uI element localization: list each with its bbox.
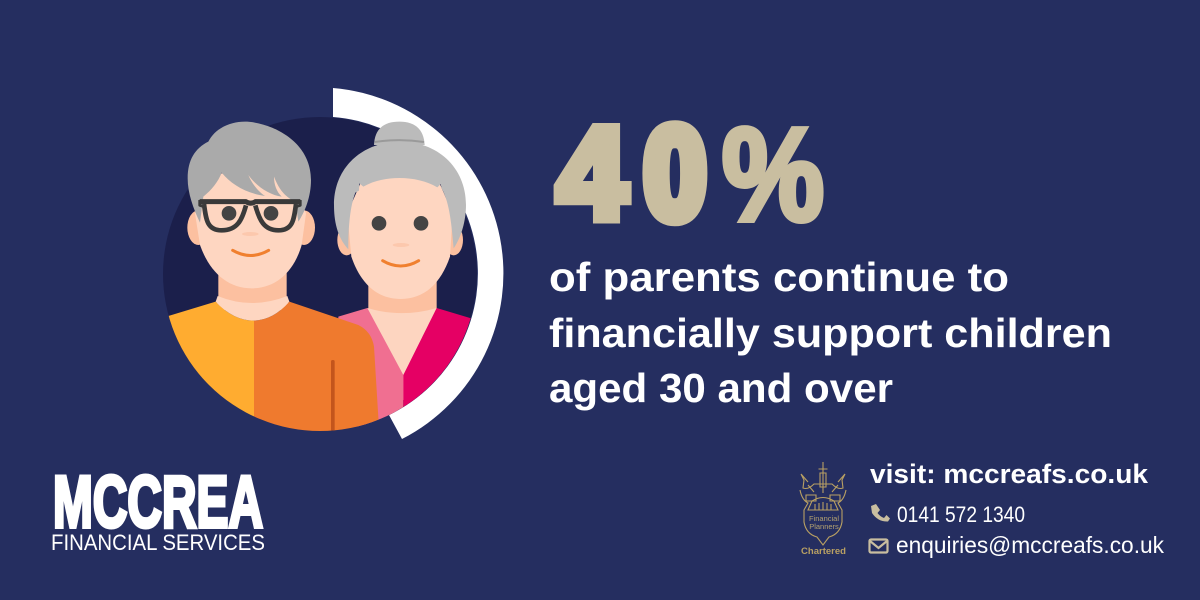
logo: McCrea Financial Services: MCCREA (53, 462, 263, 543)
icon: phone (871, 504, 890, 522)
contact: phone number: 0141 572 1340 (897, 502, 1025, 527)
man (163, 122, 379, 433)
big statistic: 40%: % (722, 101, 824, 248)
contact: website: visit: mccreafs.co.uk (870, 459, 1149, 489)
statement text: of parents continue to (549, 254, 1009, 300)
illustration: couple in 40% ring (163, 88, 503, 439)
logo: McCrea Financial Services: FINANCIAL SERVICES (51, 530, 265, 555)
big statistic: 40%: 4 (557, 100, 627, 246)
dark circle backdrop (163, 117, 477, 431)
contact: email: enquiries@mccreafs.co.uk (896, 532, 1164, 558)
woman (334, 122, 477, 427)
chartered financial planners crest (800, 462, 846, 557)
chartered financial planners crest: Planners (809, 522, 839, 531)
chartered financial planners crest: Chartered (801, 546, 846, 557)
logo: McCrea Financial Services (51, 462, 265, 555)
infographic canvas (52, 88, 1164, 558)
big statistic: 40%: 0 (644, 100, 706, 246)
glasses (200, 200, 300, 230)
big statistic: 40% (557, 100, 824, 248)
statement text: aged 30 and over (549, 365, 893, 411)
icon: envelope (870, 540, 888, 552)
statement text (549, 254, 1112, 411)
chartered financial planners crest: Financial (809, 514, 839, 523)
progress ring (333, 88, 503, 439)
statement text: financially support children (549, 310, 1112, 356)
